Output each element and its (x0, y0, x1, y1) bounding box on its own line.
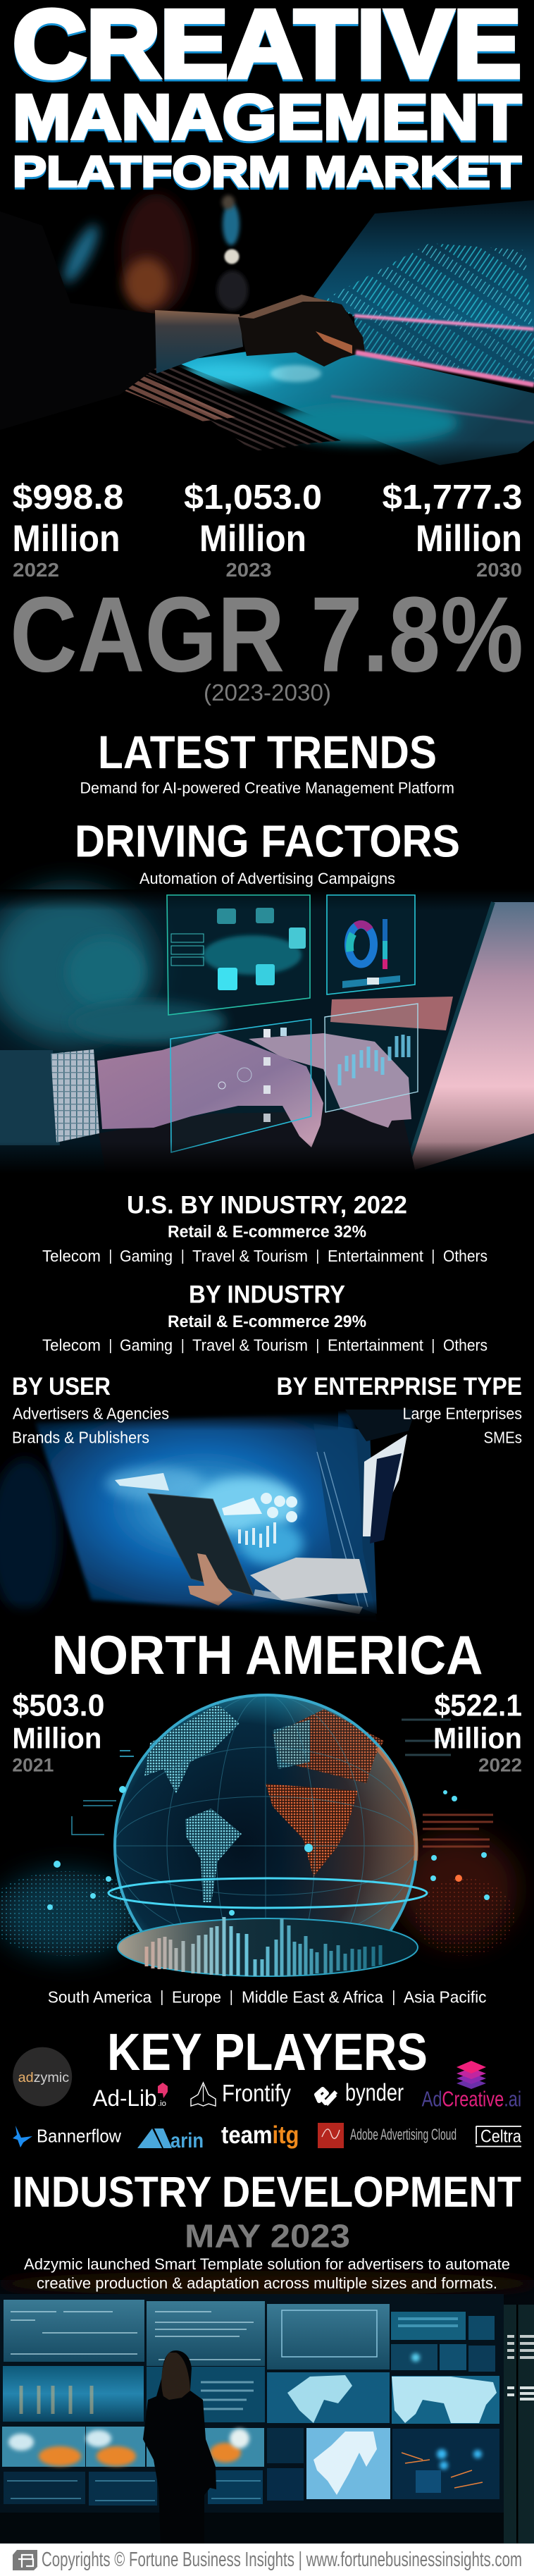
globe sphere (113, 1694, 418, 1931)
stat: 2022 market size (13, 479, 124, 581)
other regions list: Europe (172, 1988, 221, 2006)
stat: North America 2022: 2022 (478, 1755, 522, 1776)
logo: Marin: arin (170, 2129, 204, 2152)
by industry: Retail & E-commerce 29% (168, 1312, 366, 1331)
footer bar (0, 2544, 534, 2576)
hologram panel: world map workflow (167, 895, 310, 1015)
segment list: Telecom (42, 1247, 101, 1265)
hologram panel: bar chart (325, 1004, 418, 1112)
logo: Ad-Lib.io: Ad-Lib (93, 2085, 156, 2111)
segment list: Others (443, 1336, 488, 1355)
logo: AdCreative.ai: AdCreative.ai (422, 2087, 521, 2112)
left hand (97, 1033, 323, 1147)
logo: Ad-Lib.io: .io (158, 2100, 166, 2108)
logo: Adobe Advertising Cloud: Adobe Advertising Cloud (350, 2126, 457, 2143)
icon: Fortune Business Insights logo (13, 2550, 37, 2570)
driving factors (75, 816, 460, 887)
other regions list: Middle East & Africa (242, 1988, 383, 2006)
stat: 2030 market size (382, 479, 523, 581)
segment list: Others (443, 1247, 488, 1265)
stat: 2023 market size (184, 479, 322, 581)
screens row 3 (2, 2427, 499, 2499)
segment list: Entertainment (328, 1336, 424, 1355)
segment list (42, 1247, 488, 1265)
right window (504, 2305, 534, 2544)
segment list: Telecom (42, 1336, 101, 1355)
stand and bars (118, 1917, 418, 1976)
image: businessman with laptop and data screens (0, 1410, 534, 1632)
CAGR figure: (2023-2030) (204, 679, 331, 705)
stat: 2022 market size: 2022 (13, 559, 59, 581)
development description (24, 2255, 510, 2292)
screens row 4 (4, 2468, 304, 2506)
by user: Advertisers & Agencies (13, 1404, 169, 1422)
logo: AdCreative.ai (422, 2061, 521, 2112)
logo: teamitg: teamitg (221, 2121, 299, 2149)
stat: North America 2021: Million (12, 1721, 101, 1755)
logo: Frontify (191, 2080, 291, 2107)
stat: 2030 market size: Million (416, 518, 522, 560)
segment list (42, 1336, 488, 1355)
U.S. by industry: Retail & E-commerce 32% (168, 1223, 366, 1242)
segment list: Gaming (120, 1336, 173, 1355)
title: MANAGEMENT (13, 82, 521, 153)
stat: 2030 market size: $1,777.3 (382, 479, 523, 517)
other regions list (48, 1988, 486, 2006)
by user: Brands & Publishers (12, 1428, 149, 1446)
other regions list: South America (48, 1988, 151, 2006)
stat: North America 2022: Million (433, 1721, 522, 1755)
logo: adzymic (13, 2047, 72, 2107)
development description: creative production & adaptation across multiple sizes and formats. (37, 2274, 497, 2292)
by industry (42, 1281, 488, 1355)
by enterprise type: SMEs (483, 1428, 522, 1446)
latest trends: LATEST TRENDS (98, 726, 437, 778)
U.S. by industry (42, 1192, 488, 1265)
development description: Adzymic launched Smart Template solution for advertisers to automate (24, 2255, 510, 2273)
title: PLATFORM MARKET (13, 148, 521, 196)
image: woman in front of monitor wall (0, 2271, 534, 2544)
image: digital globe (0, 1694, 518, 1997)
image: hands typing with holographic dashboards (0, 888, 534, 1173)
title (13, 0, 521, 196)
stat: 2023 market size: 2023 (225, 559, 272, 581)
segment list: Travel & Tourism (192, 1247, 308, 1265)
by user (12, 1373, 169, 1446)
stat: North America 2022: $522.1 (434, 1689, 522, 1723)
segment list: Gaming (120, 1247, 173, 1265)
segment list: Travel & Tourism (192, 1336, 308, 1355)
screens row 2 (3, 2366, 499, 2424)
other regions list: Asia Pacific (404, 1988, 486, 2006)
stat: 2030 market size: 2030 (476, 559, 522, 581)
latest trends: Demand for AI-powered Creative Management Platform (80, 779, 454, 796)
latest trends (80, 726, 454, 796)
stat: 2023 market size: $1,053.0 (184, 479, 322, 517)
logo: bynder: bynder (345, 2080, 404, 2107)
date: May 2023: MAY 2023 (185, 2217, 350, 2254)
stat: 2022 market size: $998.8 (13, 479, 124, 517)
logo: adzymic: adzymic (18, 2071, 69, 2085)
logo: bynder (316, 2080, 404, 2107)
hero image: hand over glowing keyboard (0, 194, 534, 490)
hologram panel: donut chart (327, 895, 415, 994)
by industry: BY INDUSTRY (189, 1281, 345, 1309)
stat: North America 2022 (433, 1689, 522, 1776)
hologram panel: folder icons (170, 1019, 311, 1152)
segment list: Entertainment (328, 1247, 424, 1265)
by user: BY USER (12, 1373, 111, 1400)
stat: North America 2021: $503.0 (12, 1689, 104, 1723)
heading: key players: KEY PLAYERS (107, 2023, 428, 2081)
stat: North America 2021: 2021 (12, 1755, 54, 1776)
logo: Adobe Advertising Cloud (318, 2123, 457, 2148)
right hand (249, 1033, 411, 1128)
screens row 1 (4, 2300, 495, 2372)
by enterprise type (276, 1373, 522, 1446)
logo: Bannerflow: Bannerflow (37, 2126, 121, 2147)
logo: Marin (137, 2128, 204, 2152)
driving factors: DRIVING FACTORS (75, 816, 460, 867)
stat: 2023 market size: Million (199, 518, 306, 560)
U.S. by industry: U.S. BY INDUSTRY, 2022 (127, 1192, 407, 1219)
logo: Frontify: Frontify (222, 2080, 291, 2107)
dark keyboard under the hands (99, 1110, 416, 1173)
woman silhouette (143, 2350, 216, 2544)
stat: 2022 market size: Million (13, 518, 120, 560)
stat: North America 2021 (12, 1689, 104, 1776)
driving factors: Automation of Advertising Campaigns (139, 870, 395, 887)
glowing nodes (47, 1786, 490, 1916)
heading: North America: NORTH AMERICA (52, 1624, 483, 1686)
orbit ring (108, 1878, 427, 1908)
by enterprise type: Large Enterprises (403, 1404, 522, 1422)
logo: Celtra: Celtra (480, 2127, 521, 2147)
